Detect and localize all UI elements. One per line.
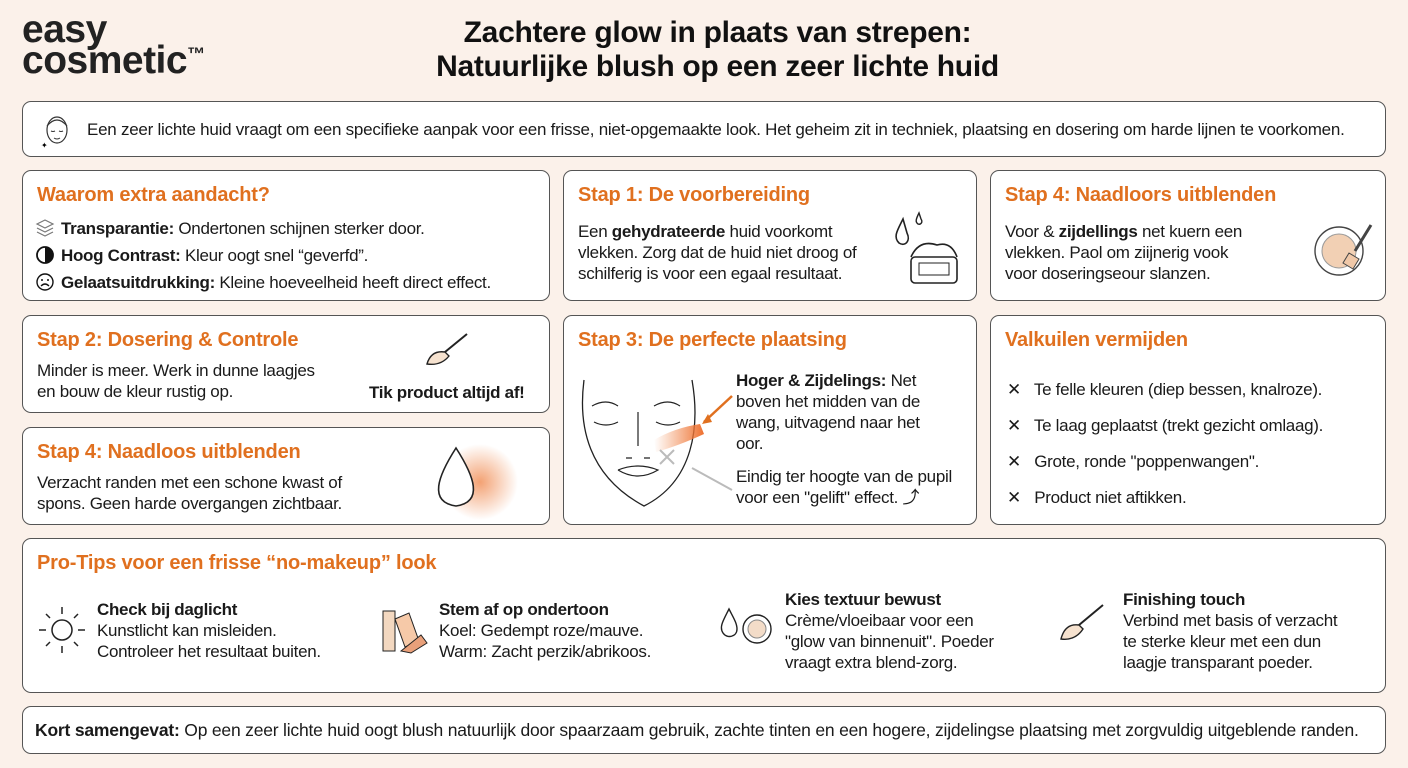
icon: sponge xyxy=(438,446,516,518)
text block: voor een "gelift" effect. ⤴ xyxy=(736,488,919,507)
title: Natuurlijke blush op een zeer lichte huid xyxy=(436,50,999,83)
heading: Stap 4: Naadloors uitblenden xyxy=(1005,184,1276,206)
icon: face xyxy=(41,116,68,150)
icon: sun xyxy=(39,607,85,653)
text block: Eindig ter hoogte van de pupil xyxy=(736,467,952,486)
logo xyxy=(22,8,205,82)
tip 4 xyxy=(1060,590,1338,672)
intro text: Een zeer lichte huid vraagt om een specifieke aanpak voor een frisse, niet-opgemaakte look. Het geheim zit in techniek, plaatsing en dosering om harde lijnen te voorkomen. xyxy=(87,120,1345,139)
text block: boven het midden van de xyxy=(736,392,920,411)
text xyxy=(578,222,857,283)
text: voor doseringseour slanzen. xyxy=(1005,264,1210,283)
panel: valkuilen xyxy=(990,315,1386,525)
list xyxy=(1007,380,1323,507)
text: vlekken. Paol om ziijnerig vook xyxy=(1005,243,1228,262)
tip 4: te sterke kleur met een dun xyxy=(1123,632,1321,651)
panel: stap 4 right xyxy=(990,170,1386,301)
tip 1: Kunstlicht kan misleiden. xyxy=(97,621,277,640)
text xyxy=(1005,222,1242,283)
text xyxy=(37,473,342,513)
tip 2: Warm: Zacht perzik/abrikoos. xyxy=(439,642,651,661)
face illustration xyxy=(582,380,733,507)
tip 4: Verbind met basis of verzacht xyxy=(1123,611,1337,630)
tip 1: Controleer het resultaat buiten. xyxy=(97,642,321,661)
text: Minder is meer. Werk in dunne laagjes xyxy=(37,361,315,380)
tip 3: Crème/vloeibaar voor een xyxy=(785,611,973,630)
tip 3: vraagt extra blend-zorg. xyxy=(785,653,957,672)
text: Voor & zijdellings net kuern een xyxy=(1005,222,1242,241)
list xyxy=(36,219,491,292)
list: ✕ Product niet aftikken. xyxy=(1007,488,1186,507)
heading: Stap 3: De perfecte plaatsing xyxy=(578,329,847,351)
list: ✕ Te laag geplaatst (trekt gezicht omlaag). xyxy=(1007,416,1323,435)
text block: oor. xyxy=(736,434,763,453)
text: en bouw de kleur rustig op. xyxy=(37,382,233,401)
icon: drop and compact xyxy=(720,608,772,644)
text block: Hoger & Zijdelings: Net xyxy=(736,371,916,390)
panel: stap 2 xyxy=(22,315,550,413)
tip 2: Stem af op ondertoon xyxy=(439,600,609,619)
panel: pro-tips xyxy=(22,538,1386,693)
icon: brush xyxy=(426,333,468,365)
panel: intro xyxy=(22,101,1386,157)
panel: stap 4 left xyxy=(22,427,550,525)
heading: Stap 2: Dosering & Controle xyxy=(37,329,298,351)
tip 4: laagje transparant poeder. xyxy=(1123,653,1313,672)
text block: wang, uitvagend naar het xyxy=(736,413,920,432)
tip 3: Kies textuur bewust xyxy=(785,590,941,609)
icon: brush xyxy=(1060,604,1104,640)
list: Transparantie: Ondertonen schijnen sterker door. xyxy=(61,219,425,238)
text: Een gehydrateerde huid voorkomt xyxy=(578,222,832,241)
heading: Stap 4: Naadloos uitblenden xyxy=(37,441,301,463)
text: vlekken. Zorg dat de huid niet droog of xyxy=(578,243,856,262)
heading: Pro-Tips voor een frisse “no-makeup” look xyxy=(37,552,436,574)
list: ✕ Te felle kleuren (diep bessen, knalroze). xyxy=(1007,380,1322,399)
heading: Waarom extra aandacht? xyxy=(37,184,270,206)
tip 1: Check bij daglicht xyxy=(97,600,237,619)
icon: face: ✦ xyxy=(41,141,48,150)
title xyxy=(436,16,999,83)
tip: Tik product altijd af! xyxy=(369,383,525,402)
list: ✕ Grote, ronde "poppenwangen". xyxy=(1007,452,1259,471)
icon: drops and cream xyxy=(895,211,958,284)
title: Zachtere glow in plaats van strepen: xyxy=(464,16,971,49)
text block xyxy=(736,371,952,507)
heading: Valkuilen vermijden xyxy=(1005,329,1188,351)
list: Gelaatsuitdrukking: Kleine hoeveelheid heeft direct effect. xyxy=(61,273,491,292)
tip 3: "glow van binnenuit". Poeder xyxy=(785,632,994,651)
panel: summary xyxy=(22,706,1386,754)
summary text: Kort samengevat: Op een zeer lichte huid oogt blush natuurlijk door spaarzaam gebruik, zachte tinten en een hogere, zijdelingse plaatsing met zorgvuldig uitgeblende randen. xyxy=(35,720,1359,740)
logo: easy xyxy=(22,8,107,51)
tip 2 xyxy=(382,600,651,661)
panel: waarom xyxy=(22,170,550,301)
tip 3 xyxy=(720,590,994,672)
tip 1 xyxy=(39,600,321,661)
text: schilferig is voor een egaal resultaat. xyxy=(578,264,842,283)
icon: compact and brush xyxy=(1314,224,1372,276)
panel: stap 3 xyxy=(563,315,977,525)
text: spons. Geen harde overgangen zichtbaar. xyxy=(37,494,342,513)
list: Hoog Contrast: Kleur oogt snel “geverfd”. xyxy=(61,246,368,265)
text: Verzacht randen met een schone kwast of xyxy=(37,473,342,492)
tip 2: Koel: Gedempt roze/mauve. xyxy=(439,621,643,640)
logo: cosmetic™ xyxy=(22,39,205,82)
heading: Stap 1: De voorbereiding xyxy=(578,184,810,206)
icon: swatches xyxy=(382,610,428,654)
panel: stap 1 xyxy=(563,170,977,301)
text xyxy=(37,361,315,401)
tip 4: Finishing touch xyxy=(1123,590,1245,609)
